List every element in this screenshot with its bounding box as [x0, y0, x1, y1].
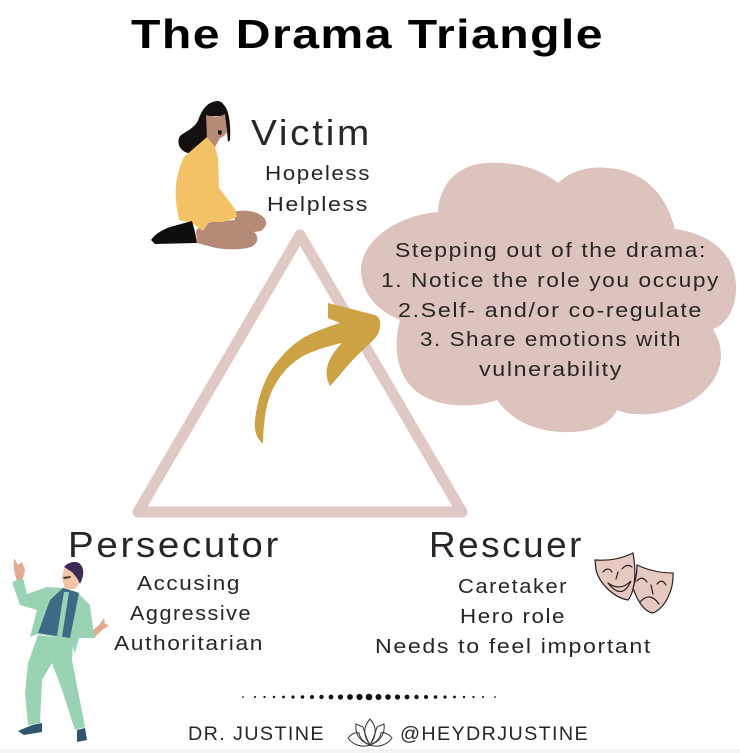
- cloud text: vulnerability: [479, 359, 623, 381]
- cloud callout: [361, 163, 736, 432]
- icon: victim figure: [151, 101, 266, 249]
- victim heading: [251, 112, 372, 216]
- rescuer heading: Caretaker: [458, 576, 568, 598]
- dotted divider: [242, 694, 496, 700]
- rescuer heading: Hero role: [460, 606, 566, 628]
- icon: theatre masks: [595, 553, 673, 613]
- persecutor heading: Aggressive: [130, 603, 252, 625]
- cloud text: 3. Share emotions with: [420, 329, 682, 351]
- persecutor heading: Accusing: [137, 573, 241, 595]
- rescuer heading: Rescuer: [429, 524, 584, 565]
- cloud text: 2.Self- and/or co-regulate: [398, 300, 703, 322]
- title: The Drama Triangle: [131, 11, 604, 57]
- footer name: DR. JUSTINE: [188, 724, 325, 745]
- cloud text: [381, 240, 720, 381]
- victim heading: Helpless: [267, 194, 369, 216]
- rescuer heading: [375, 524, 652, 658]
- icon: persecutor figure: [12, 558, 109, 742]
- victim heading: Hopeless: [265, 163, 371, 185]
- icon: lotus: [348, 719, 392, 746]
- rescuer heading: Needs to feel important: [375, 636, 652, 658]
- persecutor heading: Authoritarian: [114, 633, 264, 655]
- footer handle: @HEYDRJUSTINE: [400, 724, 589, 745]
- persecutor heading: [68, 524, 281, 655]
- persecutor heading: Persecutor: [68, 524, 281, 565]
- cloud text: Stepping out of the drama:: [395, 240, 707, 262]
- triangle: [138, 235, 462, 512]
- victim heading: Victim: [251, 112, 372, 153]
- cloud text: 1. Notice the role you occupy: [381, 270, 720, 292]
- arrow: [255, 303, 380, 443]
